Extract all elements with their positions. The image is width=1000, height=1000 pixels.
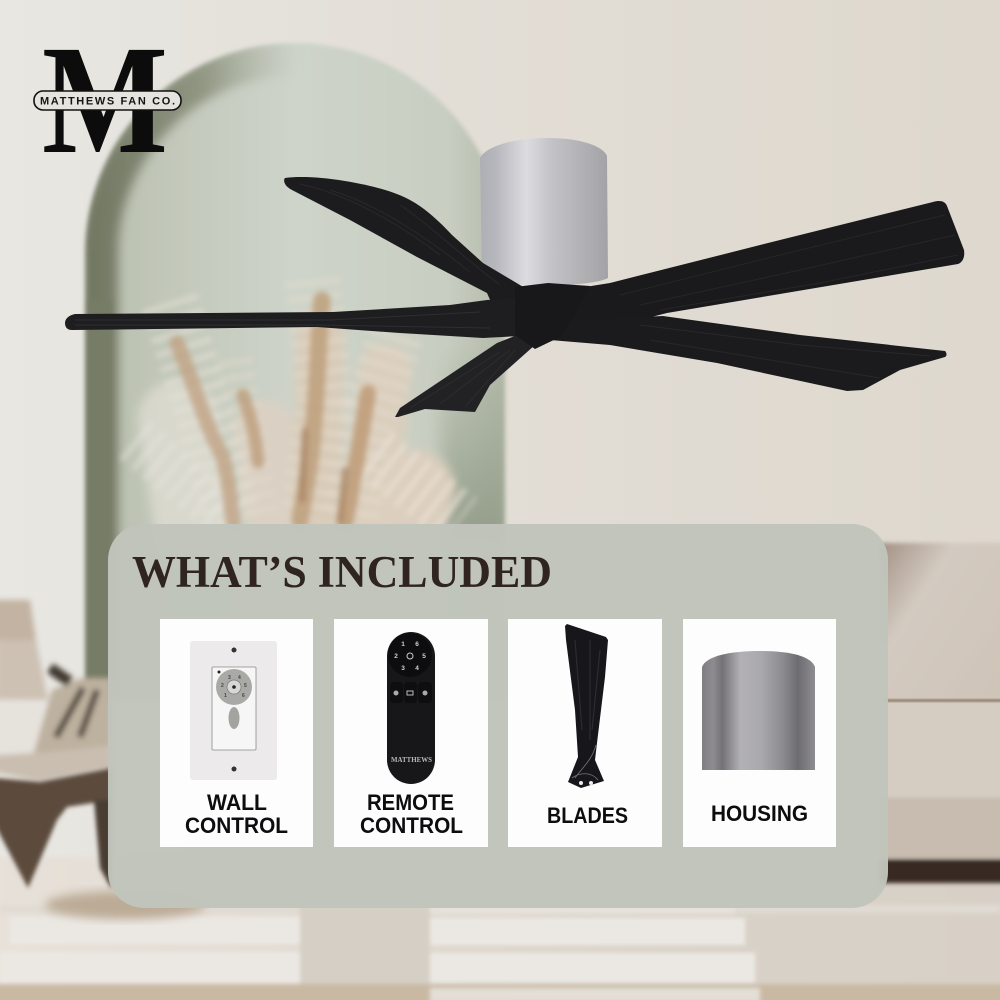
icon: blade [565, 624, 608, 788]
icon: remote: 6 [415, 641, 419, 648]
panel: what's included [108, 524, 888, 908]
fan hub [515, 283, 590, 349]
right sofa [880, 543, 1000, 883]
label [360, 790, 463, 838]
label: REMOTE [367, 790, 454, 815]
label: CONTROL [185, 813, 288, 838]
icon: remote: 3 [401, 665, 405, 672]
card: wall control [160, 619, 313, 847]
logo: Matthews Fan Co.: M [42, 14, 168, 186]
icon: wall control: 4 [238, 675, 241, 681]
label: HOUSING [711, 801, 808, 826]
icon: wall control [190, 641, 277, 780]
pampas grass [135, 280, 460, 530]
left armchair and throw [0, 600, 205, 919]
card: housing [683, 619, 836, 847]
blade: lower right [550, 316, 946, 391]
green arch niche [80, 43, 510, 700]
blade: far left [65, 297, 540, 338]
blade: lower left [395, 330, 535, 417]
label: CONTROL [360, 813, 463, 838]
icon: wall control: 5 [244, 683, 247, 689]
icon: remote [387, 632, 435, 784]
logo: Matthews Fan Co.: MATTHEWS FAN CO. [40, 96, 175, 108]
icon: remote: 1 [401, 641, 405, 648]
icon: remote: 4 [415, 665, 419, 672]
icon: remote: MATTHEWS [391, 755, 432, 764]
icon: remote: 2 [394, 653, 398, 660]
label [185, 790, 288, 838]
icon: wall control: 1 [224, 693, 227, 699]
floor [0, 857, 1000, 1000]
blade: upper left [284, 177, 530, 325]
icon: wall control: 2 [221, 683, 224, 689]
card: remote control [334, 619, 488, 847]
ceiling fan [65, 138, 964, 417]
label: BLADES [547, 803, 628, 828]
fan housing [480, 138, 608, 285]
blade: upper right [555, 201, 964, 330]
icon: wall control: 6 [242, 693, 245, 699]
card: blades [508, 619, 662, 847]
icon: remote: 5 [422, 653, 426, 660]
icon: wall control: 3 [228, 675, 231, 681]
heading: WHAT’S INCLUDED [132, 547, 552, 597]
label: WALL [207, 790, 267, 815]
icon: housing [702, 651, 815, 770]
